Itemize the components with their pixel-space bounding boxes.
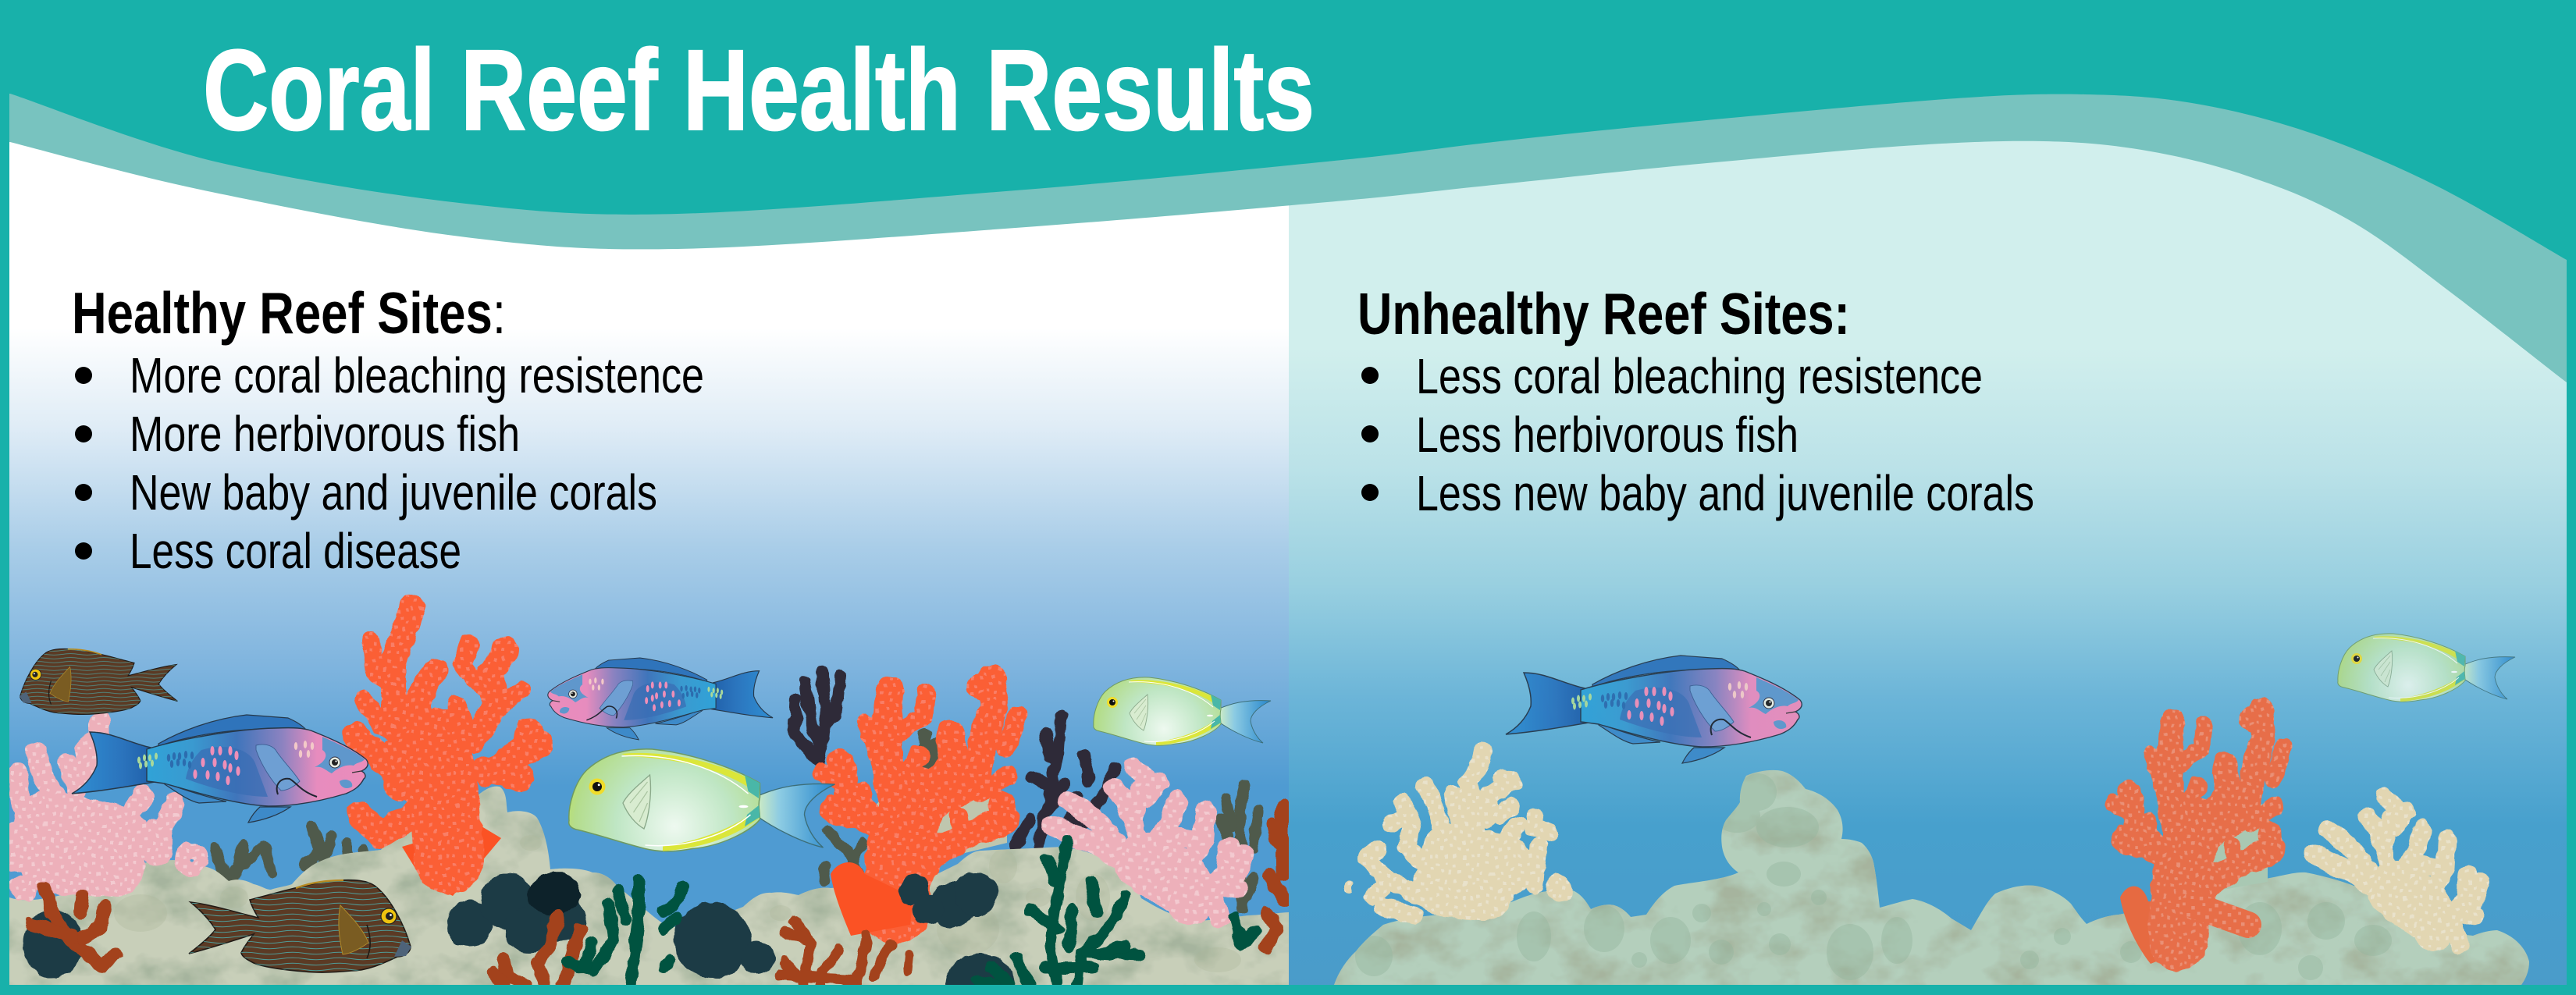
coral: bleached coral left (1349, 751, 1560, 915)
header wave: light band (9, 0, 2567, 382)
coral: brown corals (31, 807, 1285, 985)
bullet: less coral disease: Less coral disease (130, 523, 461, 579)
heading: healthy reef sites: Healthy Reef Sites: (72, 280, 506, 346)
title: Coral Reef Health Results (203, 27, 1315, 155)
reef rock (9, 787, 1289, 985)
coral: orange coral centre (822, 679, 1018, 936)
panel: healthy reef background (9, 0, 1289, 985)
text block: healthy reef sites (72, 280, 704, 579)
bullet: less new baby and juvenile corals: Less new baby and juvenile corals (1416, 465, 2034, 521)
fish: brown tang top left (20, 649, 177, 715)
scene: healthy reef (9, 607, 1289, 995)
text block: unhealthy reef sites (1357, 281, 2034, 521)
coral: pink coral right (1053, 768, 1244, 919)
coral: bleached coral right (2314, 798, 2481, 946)
fish: small yellow tang (1094, 677, 1271, 745)
coral: pink coral left (17, 721, 200, 890)
coral: orange coral left (356, 607, 540, 896)
fish: yellow tang (2338, 634, 2515, 702)
fish: small parrotfish (548, 658, 773, 740)
coral: faded orange coral (2113, 712, 2284, 964)
reef rock (1334, 770, 2529, 985)
coral: dark and grey background corals (215, 671, 1258, 909)
fish: brown tang bottom (189, 880, 411, 972)
panel: unhealthy reef background (1289, 0, 2567, 985)
bullet: less herbivorous fish: Less herbivorous fish (1416, 407, 1799, 463)
coral: dark green corals (568, 840, 1255, 985)
bullet: new baby and juvenile corals: New baby and juvenile corals (130, 464, 657, 521)
fish: large yellow tang (569, 749, 835, 851)
fish: parrotfish (1506, 656, 1802, 763)
header wave: teal band (0, 0, 2576, 260)
heading: unhealthy reef sites: Unhealthy Reef Sites: (1357, 281, 1850, 346)
fish: large parrotfish (72, 715, 368, 823)
bullet: less coral bleaching resistence: Less coral bleaching resistence (1416, 348, 1983, 404)
scene: unhealthy reef (1334, 634, 2529, 985)
bullet: more herbivorous fish: More herbivorous fish (130, 406, 520, 462)
rocks: dark sponge blobs (23, 872, 1015, 995)
bullet: more coral bleaching resistence: More coral bleaching resistence (130, 347, 704, 403)
